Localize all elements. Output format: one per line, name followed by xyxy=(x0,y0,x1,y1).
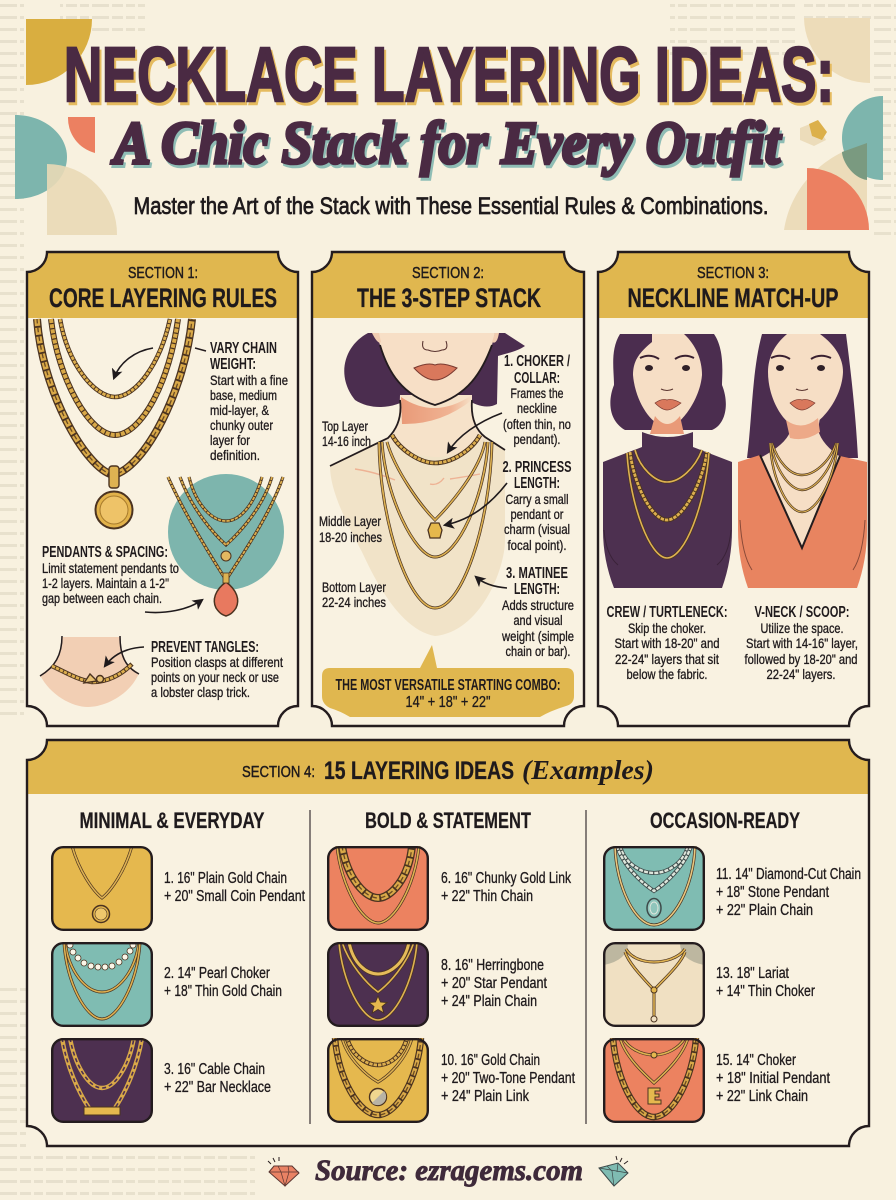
step 2 text: focal point). xyxy=(508,537,566,553)
text: v-neck / scoop: 22-24" layers. xyxy=(766,666,836,682)
illustration: woman in v-neck xyxy=(738,334,867,588)
text: v-neck / scoop xyxy=(744,604,858,682)
label: top layer: 14-16 inch xyxy=(322,433,371,449)
idea 13 thumbnail xyxy=(603,942,705,1027)
idea 2 text xyxy=(164,965,282,1000)
idea 8 text: + 24" Plain Chain xyxy=(441,993,537,1010)
section 2 heading: SECTION 2: xyxy=(412,265,484,282)
step 2 text: Carry a small xyxy=(506,491,568,507)
label: middle layer: Middle Layer xyxy=(319,513,381,529)
idea 15 text: 15. 14" Choker xyxy=(716,1052,796,1069)
section 4 heading: SECTION 4: xyxy=(242,764,315,781)
idea 10 text: 10. 16" Gold Chain xyxy=(441,1052,540,1069)
text: pendants and spacing: Limit statement pendants to xyxy=(42,560,179,576)
text: vary chain weight: layer for xyxy=(210,432,250,448)
arrow to choker xyxy=(448,413,502,452)
text: vary chain weight: WEIGHT: xyxy=(210,356,256,373)
idea 8 text: 8. 16" Herringbone xyxy=(441,957,544,974)
column heading: occasion: OCCASION-READY xyxy=(650,808,800,833)
idea 15 text: + 22" Link Chain xyxy=(716,1088,808,1105)
text: prevent tangles: PREVENT TANGLES: xyxy=(151,639,259,656)
text: v-neck / scoop: Start with 14-16" layer, xyxy=(746,635,858,651)
idea 3 text xyxy=(164,1061,271,1096)
text: pendants and spacing: 1-2 layers. Maintain a 1-2" xyxy=(42,575,169,591)
step 3 text: chain or bar). xyxy=(506,643,570,659)
idea 1 text: 1. 16" Plain Gold Chain xyxy=(164,870,287,887)
step 2 text: charm (visual xyxy=(504,521,570,537)
idea 2 text: 2. 14" Pearl Choker xyxy=(164,965,270,982)
step 1 text: COLLAR: xyxy=(514,370,560,387)
arrow to fine chain xyxy=(114,348,153,378)
text: vary chain weight: base, medium xyxy=(210,387,277,403)
illustration: neck with clasp xyxy=(40,636,139,707)
step 2 text: pendant or xyxy=(510,506,564,522)
step 3 text xyxy=(501,565,574,659)
label: bottom layer: Bottom Layer xyxy=(322,579,386,595)
step 1 text: (often thin, no xyxy=(503,416,571,432)
text: prevent tangles: a lobster clasp trick. xyxy=(151,684,250,700)
step 3 text: 3. MATINEE xyxy=(506,565,568,582)
panel: section 1 core layering rules xyxy=(27,252,298,726)
section 2 heading: THE 3-STEP STACK xyxy=(357,283,541,313)
subtitle script: A Chic Stack for Every Outfit xyxy=(110,110,782,176)
illustration: woman with three layered chains xyxy=(330,333,525,636)
icon: teal diamond xyxy=(599,1156,628,1186)
illustration: woman in turtleneck xyxy=(603,334,732,588)
text: crew / turtleneck xyxy=(606,604,728,682)
label: middle layer: 18-20 inches xyxy=(319,529,382,545)
step 1 text: pendant). xyxy=(514,431,560,447)
text: prevent tangles xyxy=(151,639,283,700)
idea 10 text xyxy=(441,1052,576,1105)
arrow to matinee chain xyxy=(476,577,507,588)
idea 6 text: 6. 16" Chunky Gold Link xyxy=(441,870,571,887)
arrow to princess pendant xyxy=(445,483,507,525)
idea 10 text: + 20" Two-Tone Pendant xyxy=(441,1070,576,1087)
step 3 text: Adds structure xyxy=(502,597,574,613)
text: vary chain weight: mid-layer, & xyxy=(210,402,270,418)
section 1 heading: SECTION 1: xyxy=(128,265,198,282)
callout: most versatile combo: 14" + 18" + 22" xyxy=(406,694,490,711)
column heading: minimal: MINIMAL & EVERYDAY xyxy=(80,808,265,833)
step 3 text: LENGTH: xyxy=(514,581,560,598)
section 3 heading xyxy=(628,265,838,313)
callout: most versatile combo xyxy=(322,645,574,717)
text: pendants and spacing: gap between each chain. xyxy=(42,590,162,606)
label: middle layer xyxy=(319,513,382,545)
idea 15 text xyxy=(716,1052,831,1105)
idea 3 text: 3. 16" Cable Chain xyxy=(164,1061,265,1078)
idea 6 text: + 22" Thin Chain xyxy=(441,888,533,905)
label: bottom layer: 22-24 inches xyxy=(322,594,386,610)
panel: section 4 fifteen layering ideas xyxy=(27,740,869,1146)
section 1 heading: CORE LAYERING RULES xyxy=(49,283,277,313)
idea 11 text: + 18" Stone Pendant xyxy=(716,884,830,901)
text: prevent tangles: Position clasps at different xyxy=(151,654,283,670)
idea 3 thumbnail xyxy=(51,1038,153,1123)
text: vary chain weight: Start with a fine xyxy=(210,372,288,388)
step 2 text: 2. PRINCESS xyxy=(502,459,572,476)
text: vary chain weight xyxy=(210,340,288,463)
idea 6 thumbnail xyxy=(327,846,429,931)
idea 15 thumbnail xyxy=(603,1038,705,1123)
text: prevent tangles: points on your neck or use xyxy=(151,669,279,685)
idea 2 thumbnail xyxy=(51,942,153,1027)
step 1 text: neckline xyxy=(517,400,557,416)
leader line xyxy=(195,348,206,351)
text: crew / turtleneck: 22-24" layers that sit xyxy=(615,651,719,667)
section 4 heading: 15 LAYERING IDEAS xyxy=(324,757,514,785)
idea 13 text: 13. 18" Lariat xyxy=(716,965,790,982)
step 1 text xyxy=(503,353,571,447)
illustration: three chain weights with coin pendant xyxy=(37,319,192,528)
panel: section 2 three-step stack xyxy=(312,252,584,726)
icon: coral diamond xyxy=(268,1157,299,1186)
idea 1 text xyxy=(164,870,306,905)
idea 8 text: + 20" Star Pendant xyxy=(441,975,548,992)
idea 11 thumbnail xyxy=(603,846,705,931)
arrow to clasp xyxy=(105,647,144,666)
arrow to pendant xyxy=(145,600,202,612)
label: top layer: Top Layer xyxy=(322,418,368,434)
idea 3 text: + 22" Bar Necklace xyxy=(164,1079,271,1096)
text: pendants and spacing xyxy=(42,544,179,606)
text: v-neck / scoop: Utilize the space. xyxy=(760,620,844,636)
step 1 text: Frames the xyxy=(510,385,564,401)
panel: section 3 neckline match-up xyxy=(598,252,869,726)
text: pendants and spacing: PENDANTS & SPACING: xyxy=(42,544,168,561)
step 3 text: weight (simple xyxy=(501,628,574,644)
idea 10 text: + 24" Plain Link xyxy=(441,1088,529,1105)
text: crew / turtleneck: Start with 18-20" and xyxy=(614,635,720,651)
idea 11 text: + 22" Plain Chain xyxy=(716,902,813,919)
step 2 text xyxy=(502,459,572,553)
text: crew / turtleneck: Skip the choker. xyxy=(628,620,706,636)
section 3 heading: SECTION 3: xyxy=(697,265,769,282)
idea 13 text xyxy=(716,965,815,1000)
column heading: bold: BOLD & STATEMENT xyxy=(365,808,531,833)
section 1 heading xyxy=(49,265,277,313)
text: v-neck / scoop: followed by 18-20" and xyxy=(744,651,858,667)
idea 8 text xyxy=(441,957,548,1010)
section 4 heading: (Examples) xyxy=(522,755,654,785)
text: v-neck / scoop: V-NECK / SCOOP: xyxy=(754,604,850,621)
idea 8 thumbnail xyxy=(327,942,429,1027)
source line: Source: ezragems.com xyxy=(315,1154,583,1187)
step 2 text: LENGTH: xyxy=(514,475,560,492)
tagline: Master the Art of the Stack with These Essential Rules & Combinations. xyxy=(134,193,768,220)
text: crew / turtleneck: below the fabric. xyxy=(626,666,708,682)
idea 13 text: + 14" Thin Choker xyxy=(716,983,815,1000)
decorative geometric shapes xyxy=(15,18,883,235)
label: bottom layer xyxy=(322,579,386,610)
idea 1 thumbnail xyxy=(51,846,153,931)
section 4 heading xyxy=(242,755,654,785)
idea 1 text: + 20" Small Coin Pendant xyxy=(164,888,306,905)
idea 6 text xyxy=(441,870,571,905)
label: top layer xyxy=(322,418,371,449)
text: vary chain weight: chunky outer xyxy=(210,417,273,433)
idea 10 thumbnail xyxy=(327,1038,429,1123)
section 2 heading xyxy=(357,265,541,313)
text: vary chain weight: definition. xyxy=(210,447,260,463)
text: crew / turtleneck: CREW / TURTLENECK: xyxy=(606,604,728,621)
idea 2 text: + 18" Thin Gold Chain xyxy=(164,983,282,1000)
callout: most versatile combo: THE MOST VERSATILE STARTING COMBO: xyxy=(336,677,560,694)
step 3 text: and visual xyxy=(514,612,562,628)
step 1 text: 1. CHOKER / xyxy=(504,353,570,370)
illustration: teal circle with spaced pendants xyxy=(168,474,284,616)
text: vary chain weight: VARY CHAIN xyxy=(210,340,277,357)
idea 11 text xyxy=(716,866,861,919)
idea 15 text: + 18" Initial Pendant xyxy=(716,1070,831,1087)
